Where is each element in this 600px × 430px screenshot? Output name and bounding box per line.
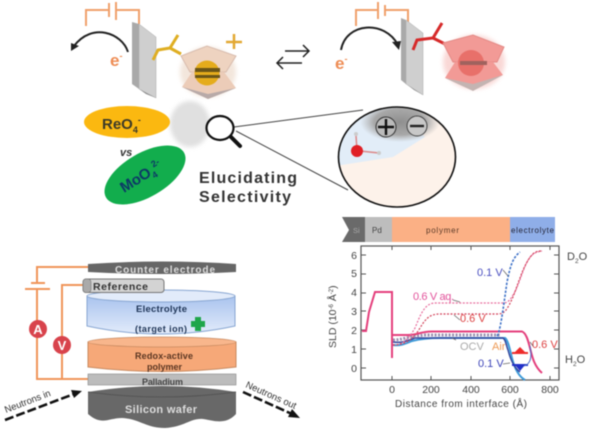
MoO4 ellipse: 2- [149,157,161,169]
curve: blue dotted to D2O [497,252,520,336]
electrochemical cell [25,262,236,428]
curve labels: 0.1 V [477,267,503,279]
reference electrode: Reference [93,281,148,293]
electron label left: - [119,51,122,61]
y tick labels: 3 [351,306,357,318]
heading line two: Selectivity [199,189,291,206]
MoO4 ellipse: 4 [150,169,160,180]
electrolyte cylinder [87,290,235,334]
layer legend bar: Pd [372,226,382,235]
magnifier [206,116,240,146]
polymer cylinder: polymer [147,362,182,372]
x axis title: Distance from interface (Å) [395,397,527,410]
host cavitand red [443,35,505,91]
curve labels [413,267,558,370]
battery circuit left [86,2,139,26]
electron label right: - [344,54,347,64]
counter electrode: Counter electrode [115,265,215,276]
y tick labels: 2 [351,325,357,337]
silicon wafer: Silicon wafer [125,404,198,416]
water molecule [351,132,381,157]
ammeter: A [33,322,43,337]
right redox scheme: reduced electrode with host [335,2,505,95]
palladium layer: Palladium [142,377,183,387]
direction arrows [512,346,531,371]
equilibrium arrows [277,45,309,69]
y tick labels: 0 [351,363,357,375]
electron label left: e [110,51,119,70]
H2O label: H [565,354,573,366]
layer legend bar: Si [353,226,360,235]
linker red [413,23,445,50]
electron arrow right [341,28,398,50]
D2O label: 2 [575,258,579,265]
voltmeter [53,336,71,354]
plus sign [226,34,242,49]
silicon wafer [88,386,236,428]
electrode right [401,18,423,95]
electron arrow left [74,32,128,52]
voltmeter: V [58,338,67,353]
layer legend bar: electrolyte [511,226,555,235]
ReO4 ellipse: ReO [102,116,133,133]
neutrons in: Neutrons in [3,388,52,416]
y tick labels: 4 [351,287,357,299]
curve: red 0.6 V dotted [393,251,542,345]
neutrons out: Neutrons out [244,380,298,412]
y tick labels: 6 [351,250,357,262]
x tick labels: 800 [541,384,559,396]
vs label: vs [120,147,132,159]
left redox scheme: oxidised electrode with host [71,2,242,99]
x tick labels: 200 [422,384,440,396]
SLD chart [326,246,588,410]
minus ion [407,116,427,136]
x tick labels [389,384,559,396]
x tick labels: 0 [389,384,395,396]
polymer cylinder: Redox-active [135,351,193,361]
electrode left [132,22,156,98]
ammeter [29,320,47,338]
reference electrode [83,279,164,293]
MoO4 ellipse [95,133,195,217]
layer legend bar [342,217,555,242]
y tick labels: 5 [351,268,357,280]
green target ion [191,317,205,331]
polymer cylinder [88,337,236,372]
label leaders [452,270,533,364]
y axis title: Å [326,294,339,304]
y tick labels: 1 [351,344,357,356]
layer legend bar: polymer [426,226,459,235]
D2O label: O [579,251,588,263]
MoO4 ellipse: MoO [117,164,154,196]
wires [25,267,88,379]
curve: pink 0.6 V aq dotted [393,251,542,345]
y tick labels [351,250,357,375]
plus ion [376,117,396,137]
ReO4 ellipse: - [138,115,141,125]
y axis title: -2 [329,288,335,294]
grey highlight spot [170,101,210,147]
curve labels: 0.6 V aq. [413,291,454,303]
zoom lines [234,110,363,190]
zoomed circle [335,102,456,207]
ReO4 ellipse [84,106,170,138]
neutrons in [3,388,82,420]
electrolyte cylinder: Electrolyte [136,304,187,315]
H2O label: 2 [573,361,577,368]
y axis title: ) [327,285,339,289]
host cavitand with anion [180,46,236,99]
H2O label: O [577,354,586,366]
curve labels: 0.6 V [532,339,558,351]
electrolyte cylinder: (target ion) [135,324,187,334]
plot frame and ticks [361,246,559,380]
curve labels: OCV [460,341,484,353]
curve: grey dotted OCV [393,335,500,340]
battery circuit right [356,2,408,26]
linker yellow [153,35,181,60]
curve labels: Air [492,341,506,353]
x tick labels: 400 [462,384,480,396]
palladium layer [88,374,236,387]
D2O label: D [567,251,575,263]
ReO4 ellipse: 4 [133,125,138,135]
x tick labels: 600 [501,384,519,396]
heading: Elucidating [199,170,297,187]
electron label right: e [335,54,344,73]
counter electrode [88,262,236,276]
curve: red 0.6 V solid [362,292,542,373]
curve labels: 0.6 V [460,313,486,325]
curve: blue reduced [393,338,525,380]
y axis title: -6 [329,303,335,309]
curve labels: 0.1 V [478,358,504,370]
curve: dark blue [393,338,520,372]
y axis title: SLD (10 [327,309,339,348]
